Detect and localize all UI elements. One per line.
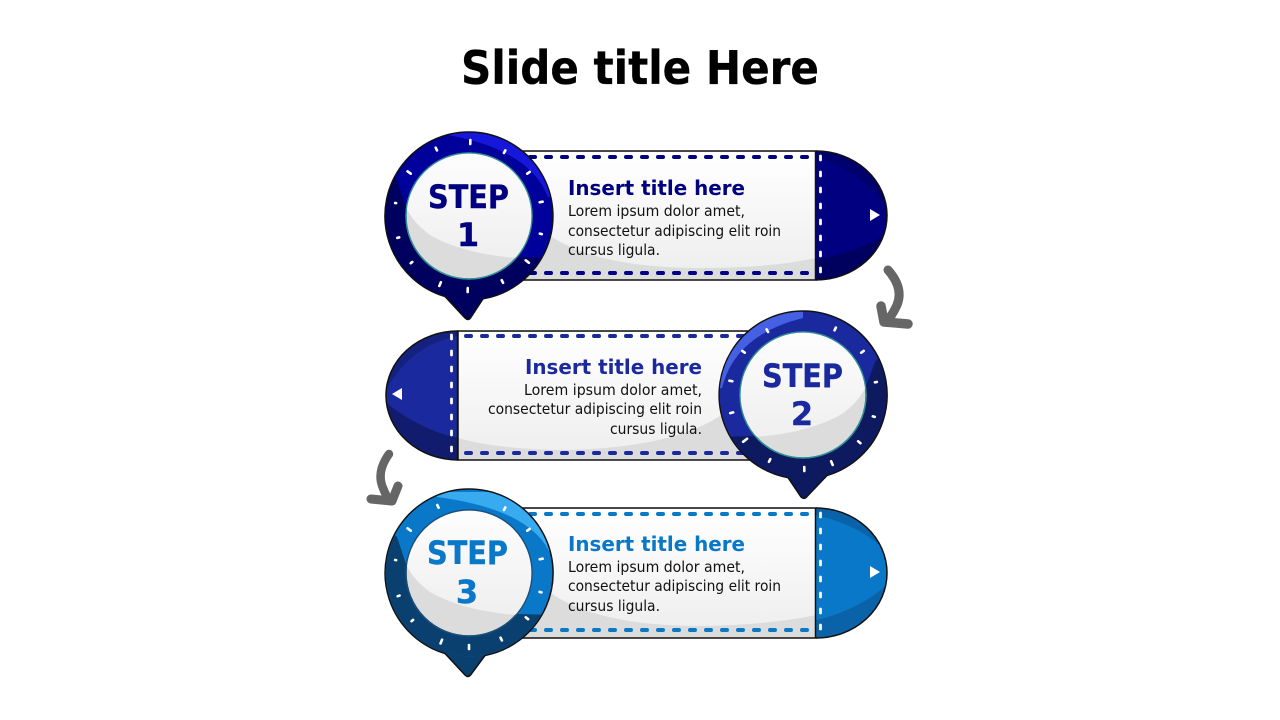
panel body: step 1 [510, 151, 816, 280]
end cap: step 3 [816, 508, 890, 642]
text block: step 3: Lorem ipsum dolor amet, [568, 558, 745, 576]
text block: step 1: Insert title here [568, 176, 745, 200]
text block: step 1: Lorem ipsum dolor amet, [568, 202, 745, 220]
arrow: step 1 to step 2 [881, 270, 908, 324]
label: step 2: STEP [762, 357, 843, 395]
text block: step 2: Lorem ipsum dolor amet, [524, 381, 702, 399]
text block: step 3 [568, 532, 781, 615]
title: Slide title Here [461, 41, 819, 95]
label: step 2 [762, 357, 843, 433]
icon: right arrowhead [870, 209, 880, 221]
text block: step 1: cursus ligula. [568, 241, 660, 259]
label: step 1: 1 [457, 216, 479, 254]
end cap: step 2 [385, 331, 458, 465]
label: step 3: STEP [427, 534, 508, 572]
panel: step 1 [380, 130, 890, 330]
arrow: step 2 to step 3 [371, 454, 398, 501]
label: step 1 [428, 178, 509, 254]
text block: step 2: cursus ligula. [610, 420, 702, 438]
text block: step 1 [568, 176, 781, 259]
text block: step 3: cursus ligula. [568, 597, 660, 615]
text block: step 3: consectetur adipiscing elit roin [568, 577, 781, 595]
icon: right arrowhead [870, 566, 880, 578]
panel body: step 3 [510, 508, 816, 638]
label: step 2: 2 [791, 395, 813, 433]
text block: step 2: consectetur adipiscing elit roin [488, 400, 702, 418]
icon: left arrowhead [392, 388, 402, 400]
panel: step 2 [385, 311, 892, 510]
text block: step 2: Insert title here [525, 355, 702, 379]
panel: step 3 [380, 489, 890, 687]
panel body: step 2 [458, 331, 762, 460]
end cap: step 1 [816, 151, 890, 285]
location pin: step 2 [718, 310, 888, 500]
location pin: step 3 [380, 489, 560, 687]
label: step 3 [427, 534, 508, 611]
text block: step 1: consectetur adipiscing elit roin [568, 222, 781, 240]
text block: step 3: Insert title here [568, 532, 745, 556]
label: step 1: STEP [428, 178, 509, 216]
location pin: step 1 [384, 131, 554, 320]
text block: step 2 [488, 355, 702, 438]
label: step 3: 3 [456, 573, 478, 611]
